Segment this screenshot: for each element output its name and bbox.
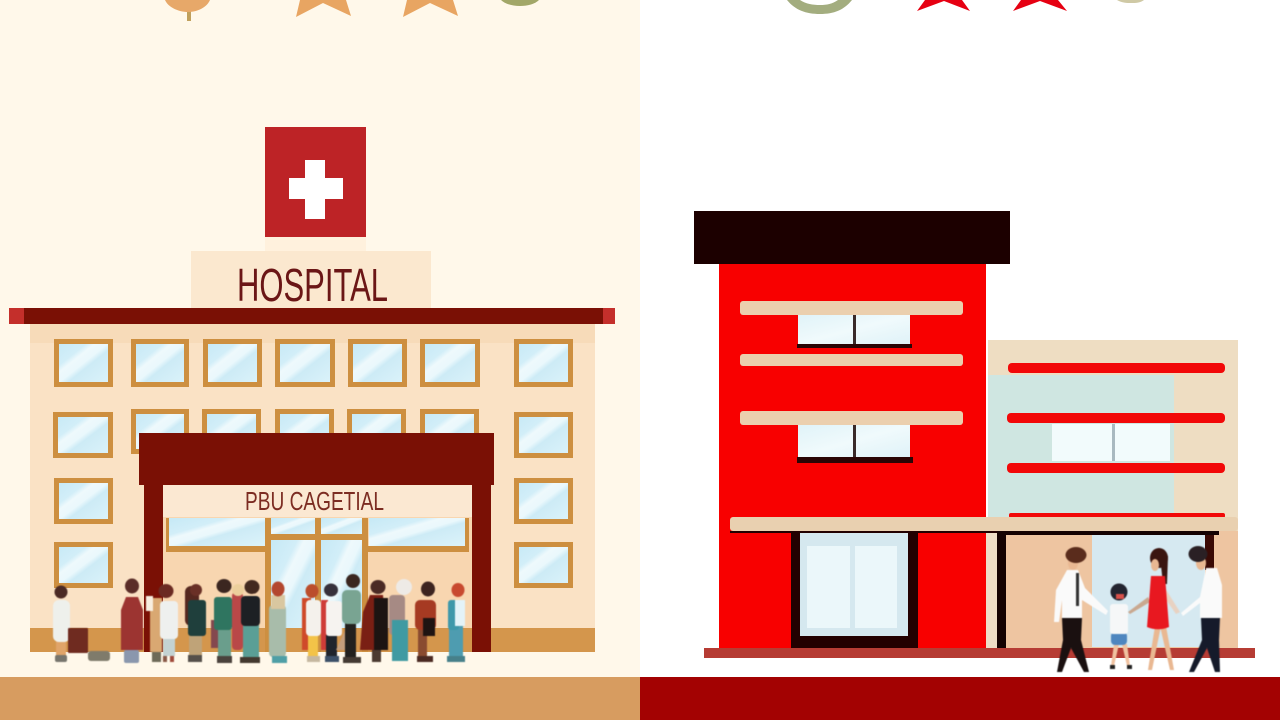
windows bbox=[56, 342, 570, 586]
family walking bbox=[1054, 546, 1222, 672]
icon: green ring bbox=[787, 0, 852, 14]
left rating icons bbox=[165, 0, 539, 21]
right ground band bbox=[640, 677, 1280, 720]
person: patient in brown bbox=[415, 582, 436, 662]
person: doctor bbox=[53, 586, 70, 662]
tower bands bbox=[740, 301, 963, 425]
person: patient in white top bbox=[158, 584, 178, 662]
private hospital building bbox=[694, 211, 1255, 658]
hospital name board bbox=[191, 251, 431, 311]
sign neck bbox=[265, 237, 366, 251]
tower windows bbox=[797, 315, 913, 463]
panel: private hospital background bbox=[640, 0, 1280, 678]
person: elderly patient bbox=[389, 579, 412, 661]
person: patient in red coat bbox=[121, 578, 143, 663]
person: patient with long hair bbox=[185, 584, 206, 662]
person: patient in teal bbox=[447, 583, 465, 662]
entrance sign text: PBU CAGETIAL bbox=[245, 486, 384, 516]
person: father bbox=[1054, 547, 1108, 672]
person: grandfather bbox=[1181, 546, 1222, 672]
entrance glass bbox=[169, 518, 465, 628]
entrance canopy bbox=[139, 433, 494, 652]
hospital name board: HOSPITAL bbox=[237, 259, 388, 311]
pavement ledge bbox=[704, 648, 1255, 658]
suitcase bbox=[68, 628, 88, 653]
person: patient in black jacket bbox=[240, 580, 260, 663]
icon: star bbox=[403, 0, 458, 17]
icon: red star bbox=[917, 0, 970, 11]
shopfront bbox=[986, 530, 1238, 648]
icon: pin bbox=[165, 0, 210, 21]
entrance bbox=[163, 485, 472, 652]
right rating icons bbox=[787, 0, 1144, 14]
side wing bbox=[988, 340, 1238, 535]
icon: green badge bbox=[501, 0, 539, 6]
bag bbox=[88, 651, 110, 661]
person: patient with red scarf bbox=[321, 584, 342, 662]
facade bbox=[30, 324, 595, 652]
person: patient in tan coat bbox=[146, 596, 162, 662]
panel: public hospital background bbox=[0, 0, 640, 678]
person: patient in white with yellow trousers bbox=[302, 584, 321, 662]
public hospital building bbox=[9, 127, 615, 652]
ground floor door bbox=[791, 532, 918, 648]
person: patient in sage bbox=[269, 582, 287, 663]
red tower bbox=[719, 264, 986, 650]
person: patient in red behind bbox=[232, 584, 244, 650]
side wing stripes bbox=[1007, 363, 1225, 518]
black roof bbox=[694, 211, 1010, 264]
awning bbox=[730, 517, 1238, 531]
icon: red star bbox=[1013, 0, 1067, 11]
icon: beige badge bbox=[1117, 0, 1144, 3]
left ground band bbox=[0, 677, 640, 720]
person: child bbox=[1110, 584, 1132, 669]
entrance frames bbox=[166, 518, 469, 652]
person: patient in sage top bbox=[336, 574, 361, 663]
queue of patients bbox=[53, 574, 465, 663]
black beam under awning bbox=[730, 531, 997, 533]
person: patient in green top bbox=[211, 579, 232, 663]
person: mother bbox=[1128, 548, 1180, 670]
roof bbox=[9, 308, 615, 324]
icon: red cross sign bbox=[265, 127, 366, 237]
icon: star bbox=[296, 0, 351, 17]
person: patient in dark cloak bbox=[360, 580, 388, 662]
